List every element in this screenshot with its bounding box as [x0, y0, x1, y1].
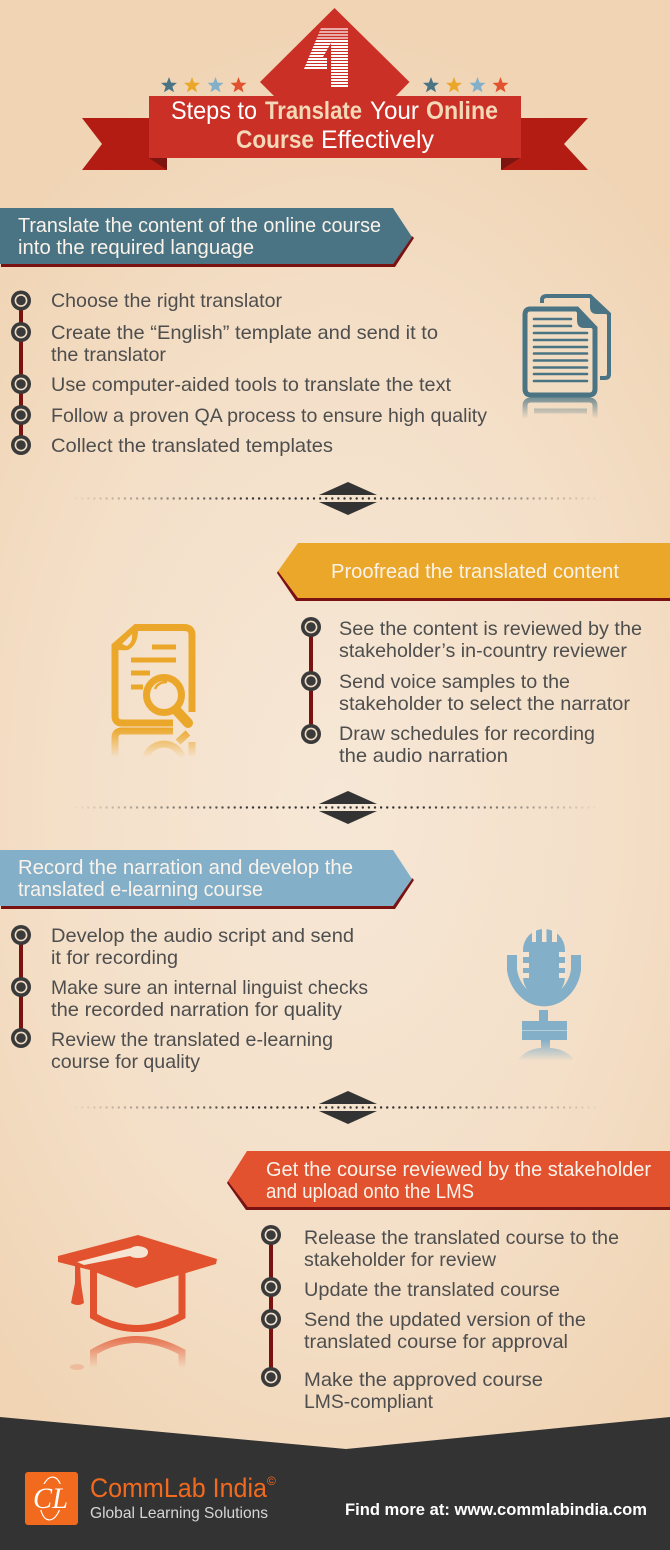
- list step 3: Review the translated e-learning: [51, 1029, 333, 1051]
- list step 4: Make the approved course: [304, 1369, 543, 1391]
- header ribbon step 1: Translate the content of the online course: [18, 214, 381, 237]
- panel: step 1: [0, 208, 609, 457]
- list step 1: Create the “English” template and send it to: [51, 322, 438, 344]
- title text: Effectively: [321, 126, 434, 154]
- ribbon fold right: [501, 158, 520, 170]
- header ribbon step 3: Record the narration and develop the: [18, 856, 353, 879]
- list step 1: the translator: [51, 344, 167, 366]
- stars right: [423, 77, 508, 92]
- list step 1: Collect the translated templates: [51, 435, 333, 457]
- list step 2: stakeholder to select the narrator: [339, 693, 631, 715]
- footer: [0, 1417, 670, 1550]
- logo mark: [25, 1472, 78, 1525]
- divider 2: [70, 791, 602, 824]
- red diamond: [260, 8, 410, 102]
- logo mark: CL: [33, 1482, 68, 1515]
- timeline step 4: [261, 1225, 281, 1387]
- header ribbon step 2: Proofread the translated content: [331, 560, 619, 583]
- list step 3: it for recording: [51, 947, 178, 969]
- list step 1: Follow a proven QA process to ensure high quality: [51, 405, 487, 427]
- header ribbon step 3: [0, 850, 414, 909]
- header ribbon step 1: into the required language: [18, 236, 254, 259]
- title text: Course: [236, 126, 314, 154]
- list step 2: stakeholder’s in-country reviewer: [339, 640, 627, 662]
- title text: Your: [370, 97, 419, 125]
- list step 4: translated course for approval: [304, 1331, 568, 1353]
- header ribbon step 4: and upload onto the LMS: [266, 1180, 474, 1203]
- panel: step 3: [0, 850, 576, 1073]
- timeline step 1: [11, 290, 31, 455]
- panel: step 2: [112, 543, 670, 767]
- list step 1: Use computer-aided tools to translate the text: [51, 374, 452, 396]
- header ribbon step 4: Get the course reviewed by the stakeholder: [266, 1158, 651, 1181]
- panel: step 4: [58, 1151, 670, 1413]
- timeline step 2: [301, 617, 321, 744]
- list step 4: Send the updated version of the: [304, 1309, 586, 1331]
- list step 2: Send voice samples to the: [339, 671, 570, 693]
- company name: CommLab India: [90, 1473, 268, 1503]
- list step 3: course for quality: [51, 1051, 200, 1073]
- list step 3: Develop the audio script and send: [51, 925, 354, 947]
- website link text: Find more at: www.commlabindia.com: [345, 1500, 647, 1519]
- header ribbon step 1: [0, 208, 414, 267]
- header ribbon step 3: translated e-learning course: [18, 878, 263, 901]
- ribbon tail left: [82, 118, 167, 170]
- header ribbon step 4: [227, 1151, 670, 1210]
- list step 2: Draw schedules for recording: [339, 723, 595, 745]
- stars left: [161, 77, 246, 92]
- ribbon tail right: [501, 118, 588, 170]
- icon: document with magnifier: [112, 624, 192, 757]
- icon: microphone: [512, 929, 576, 1060]
- list step 2: [339, 618, 642, 767]
- header ribbon step 2: [277, 543, 670, 601]
- icon: graduation cap: [58, 1235, 217, 1370]
- list step 4: stakeholder for review: [304, 1249, 497, 1271]
- copyright mark: ©: [267, 1474, 276, 1488]
- title text: Translate: [265, 97, 362, 125]
- title text: [171, 97, 498, 154]
- title text: Online: [426, 97, 498, 125]
- numeral 4: [304, 28, 348, 88]
- list step 1: Choose the right translator: [51, 290, 283, 312]
- list step 2: See the content is reviewed by the: [339, 618, 642, 640]
- footer band: [0, 1417, 670, 1550]
- divider 3: [70, 1091, 602, 1124]
- tagline: Global Learning Solutions: [90, 1505, 268, 1522]
- list step 3: [51, 925, 368, 1073]
- timeline step 3: [11, 925, 31, 1048]
- banner body: [149, 96, 521, 158]
- divider 1: [70, 482, 602, 515]
- list step 2: the audio narration: [339, 745, 508, 767]
- list step 1: [51, 290, 487, 457]
- list step 3: the recorded narration for quality: [51, 999, 342, 1021]
- list step 4: Release the translated course to the: [304, 1227, 619, 1249]
- list step 4: LMS-compliant: [304, 1391, 434, 1413]
- list step 4: [304, 1227, 619, 1413]
- list step 4: Update the translated course: [304, 1279, 560, 1301]
- ribbon fold left: [149, 158, 167, 170]
- title text: Steps to: [171, 97, 257, 125]
- icon: documents: [525, 296, 609, 418]
- title banner: [82, 8, 588, 170]
- list step 3: Make sure an internal linguist checks: [51, 977, 368, 999]
